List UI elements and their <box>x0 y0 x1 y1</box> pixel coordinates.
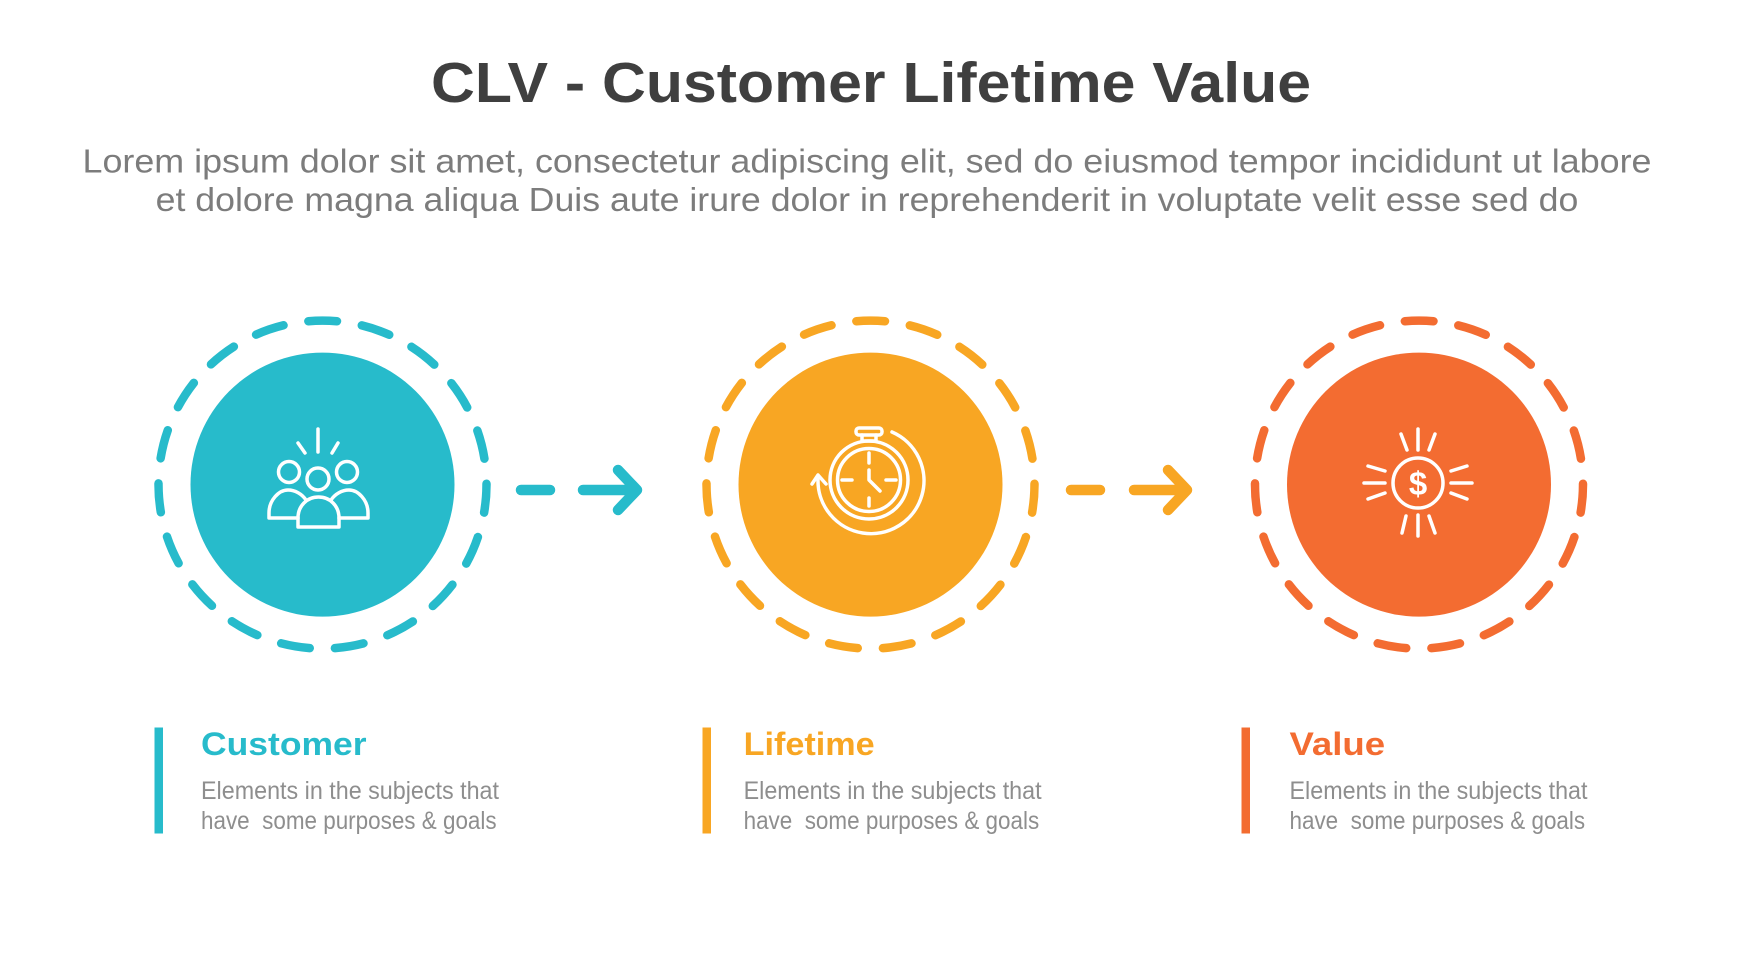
dashed ring: value <box>1255 321 1583 649</box>
panel: value circle <box>1255 321 1583 649</box>
text block: customer <box>154 726 499 835</box>
accent bar: customer <box>154 728 163 834</box>
heading: lifetime: Lifetime <box>744 726 875 762</box>
panel: customer circle <box>158 321 486 649</box>
icon: stopwatch <box>812 428 924 534</box>
arrow: lifetime to value <box>1071 470 1187 510</box>
icon: people group <box>269 429 368 527</box>
dashed ring: lifetime <box>706 321 1034 649</box>
filled circle: customer <box>190 353 454 617</box>
title: CLV - Customer Lifetime Value <box>431 51 1311 115</box>
filled circle: value <box>1287 353 1551 617</box>
icon: shining dollar coin: $ <box>1409 465 1427 502</box>
description: lifetime: Elements in the subjects that <box>744 777 1042 805</box>
dashed ring: customer <box>158 321 486 649</box>
description: customer <box>201 777 499 835</box>
text block: value <box>1242 726 1588 835</box>
description: lifetime <box>744 777 1042 835</box>
subtitle text block <box>82 142 1651 218</box>
description: customer: Elements in the subjects that <box>201 777 499 805</box>
arrow: customer to lifetime <box>521 470 637 510</box>
subtitle text block: et dolore magna aliqua Duis aute irure dolor in reprehenderit in voluptate velit esse sed do <box>156 181 1578 218</box>
heading: customer: Customer <box>201 726 367 762</box>
description: customer: have some purposes & goals <box>201 807 497 835</box>
description: value: have some purposes & goals <box>1290 807 1585 835</box>
heading: value: Value <box>1290 726 1385 762</box>
accent bar: value <box>1242 728 1250 834</box>
accent bar: lifetime <box>702 728 711 834</box>
subtitle text block: Lorem ipsum dolor sit amet, consectetur adipiscing elit, sed do eiusmod tempor incididunt ut labore <box>82 142 1651 180</box>
description: value: Elements in the subjects that <box>1290 777 1588 805</box>
filled circle: lifetime <box>738 353 1002 617</box>
panel: lifetime circle <box>706 321 1034 649</box>
text block: lifetime <box>702 726 1042 835</box>
description: value <box>1290 777 1588 835</box>
description: lifetime: have some purposes & goals <box>744 807 1039 835</box>
icon: shining dollar coin <box>1364 429 1472 536</box>
